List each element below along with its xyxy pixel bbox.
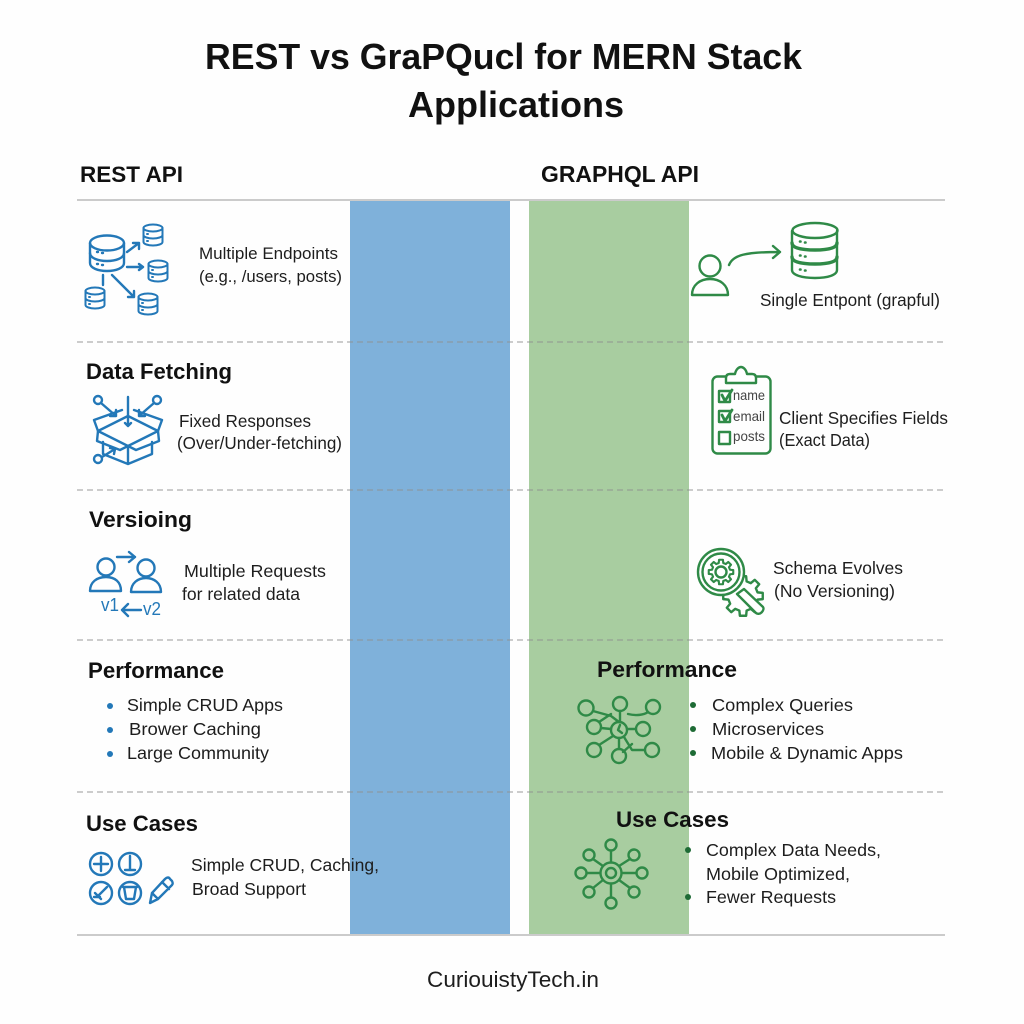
- heading: performance left: Performance: [88, 658, 224, 683]
- text: client specifies fields: [779, 408, 948, 450]
- icon: user to single database: [692, 223, 838, 295]
- icon: network graph: [578, 697, 660, 763]
- text: multiple endpoints: [199, 244, 342, 286]
- text: simple CRUD: Broad Support: [192, 879, 306, 899]
- text: fixed responses: (Over/Under-fetching): [177, 433, 342, 453]
- heading: use cases right: Use Cases: [616, 807, 729, 832]
- title: [205, 36, 803, 125]
- icon: clipboard checklist: posts: [733, 428, 765, 444]
- icon: users with versions: [90, 552, 161, 619]
- text: client specifies fields: Client Specifies Fields: [779, 408, 948, 428]
- list: REST performance: Large Community: [127, 743, 269, 763]
- list: REST performance: [107, 695, 283, 763]
- text: fixed responses: Fixed Responses: [179, 411, 311, 431]
- list: GraphQL performance: Mobile & Dynamic Apps: [711, 743, 903, 763]
- text: multiple requests: Multiple Requests: [184, 561, 326, 581]
- list: GraphQL use cases: Complex Data Needs,: [706, 840, 881, 860]
- text: multiple endpoints: (e.g., /users, posts): [199, 267, 342, 286]
- list: GraphQL performance: Complex Queries: [712, 695, 853, 715]
- title: Applications: [408, 84, 624, 125]
- text: schema evolves: (No Versioning): [774, 581, 895, 601]
- heading: versioning: Versioing: [89, 507, 192, 532]
- column heading: REST API: REST API: [80, 162, 183, 187]
- text: simple CRUD: [191, 855, 379, 899]
- text: single endpoint: Single Entpont (grapful): [760, 290, 940, 310]
- icon: users with versions: v1: [101, 595, 119, 615]
- footer: CuriouistyTech.in: [427, 967, 599, 992]
- icon: clipboard checklist: email: [733, 408, 765, 424]
- list: GraphQL performance: [690, 695, 903, 763]
- icon: users with versions: v2: [143, 599, 161, 619]
- icon: multiple databases: [86, 224, 168, 314]
- icon: magnifier gear and wrench: [698, 549, 763, 616]
- list: GraphQL use cases: Fewer Requests: [706, 887, 836, 907]
- heading: data fetching: Data Fetching: [86, 359, 232, 384]
- text: schema evolves: [773, 558, 903, 601]
- list: GraphQL use cases: [685, 840, 881, 907]
- text: multiple requests: [182, 561, 326, 604]
- title: REST vs GraPQucl for MERN Stack: [205, 36, 803, 77]
- text: multiple endpoints: Multiple Endpoints: [199, 244, 338, 263]
- list: GraphQL use cases: Mobile Optimized,: [706, 864, 850, 884]
- text: client specifies fields: (Exact Data): [779, 430, 870, 450]
- green column band: [529, 200, 689, 935]
- list: GraphQL performance: Microservices: [712, 719, 824, 739]
- column heading: GraphQL API: GRAPHQL API: [541, 161, 699, 187]
- blue column band: [350, 200, 510, 935]
- text: simple CRUD: Simple CRUD, Caching,: [191, 855, 379, 875]
- list: REST performance: Brower Caching: [129, 719, 261, 739]
- list: REST performance: Simple CRUD Apps: [127, 695, 283, 715]
- icon: CRUD actions: [90, 853, 173, 904]
- icon: hub and spoke: [576, 840, 648, 908]
- icon: clipboard checklist: [712, 367, 770, 454]
- heading: use cases left: Use Cases: [86, 811, 198, 836]
- text: multiple requests: for related data: [182, 584, 300, 604]
- text: fixed responses: [177, 411, 342, 453]
- text: schema evolves: Schema Evolves: [773, 558, 903, 578]
- icon: clipboard checklist: name: [733, 387, 765, 403]
- icon: open box with arrows: [94, 396, 162, 464]
- heading: performance right: Performance: [597, 657, 737, 682]
